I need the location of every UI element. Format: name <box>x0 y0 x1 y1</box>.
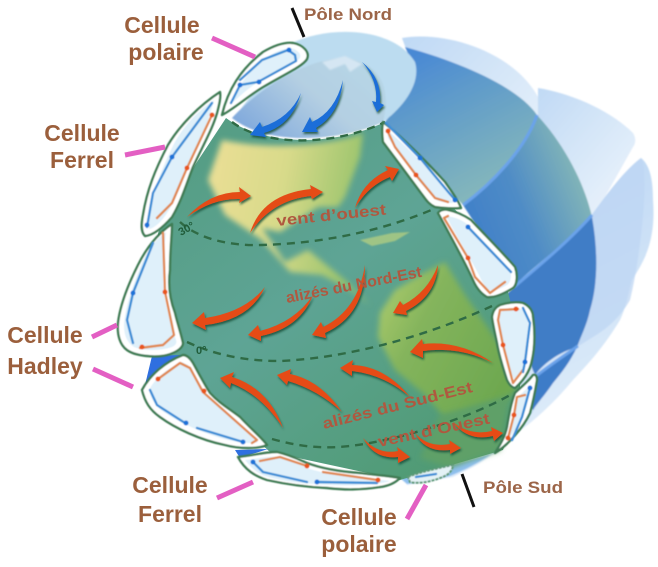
text: alizés du Sud-Est: alizés du Sud-Est <box>321 379 474 433</box>
arrow: westerly 2 <box>250 185 323 233</box>
label 0 degrees: 0° <box>196 345 207 357</box>
globe front face <box>150 118 520 480</box>
south pole tick <box>462 474 474 507</box>
blue band two <box>463 115 592 285</box>
arrow: northeast trade 1 <box>192 287 265 330</box>
circulation cells <box>118 43 537 489</box>
label: Cellule Hadley: Hadley <box>7 353 83 379</box>
label: Cellule polaire top: Cellule <box>124 12 200 38</box>
dark blue wedges between cells <box>145 355 268 458</box>
arrow: southern westerly 2 <box>415 433 461 454</box>
arrow: polar east 2 <box>302 80 343 132</box>
leader: Ferrel top <box>125 147 165 155</box>
cell: Ferrel, lower right <box>495 375 537 453</box>
inner lighter ribbon <box>577 158 645 347</box>
arrow: northeast trade 4 <box>393 265 438 315</box>
label: Cellule polaire bottom: Cellule <box>321 504 397 530</box>
southern land <box>420 395 510 468</box>
cell: Ferrel, bottom <box>238 452 400 489</box>
south rim <box>400 408 535 484</box>
label: Cellule Hadley: Cellule <box>7 322 83 348</box>
label: Cellule polaire bottom: polaire <box>321 531 397 557</box>
cell labels <box>7 12 397 557</box>
north polar cap <box>240 32 416 122</box>
North America <box>208 133 370 305</box>
leader: Hadley lower <box>93 369 133 387</box>
north polar cap, inner tone <box>232 58 386 138</box>
arrow: southern westerly 1 <box>363 438 410 463</box>
label: Cellule Ferrel bottom: Cellule <box>132 472 208 498</box>
arrow: polar east 1 <box>250 93 301 137</box>
cell: polar, top <box>222 43 308 115</box>
leader: polar top <box>212 38 255 57</box>
cell: polar, bottom <box>408 465 453 483</box>
text: vent d'ouest: vent d’ouest <box>276 202 387 230</box>
wedge at equator <box>145 355 182 385</box>
cell: Hadley, upper right <box>438 210 517 297</box>
wind arrows <box>187 62 503 463</box>
label: Pôle Sud: Pôle Sud <box>483 478 563 497</box>
wind labels <box>276 202 491 451</box>
cell: Hadley, lower left <box>142 355 267 448</box>
cell leader lines <box>92 38 426 519</box>
blue band three <box>497 217 596 375</box>
arrow: polar east 3 <box>362 62 384 112</box>
pale outer layer, upper <box>385 37 541 200</box>
globe background layers <box>232 32 653 485</box>
arrow: southern westerly 3 <box>453 422 503 441</box>
South America <box>378 262 518 418</box>
wedge at southern Hadley cell <box>235 449 268 458</box>
light band edges <box>463 115 592 376</box>
pale outer layer, lower <box>400 158 653 485</box>
cell: Hadley, left <box>118 224 183 356</box>
latitude lines <box>176 122 512 447</box>
leader: Hadley upper <box>92 325 117 337</box>
label: Cellule Ferrel top: Cellule <box>44 120 120 146</box>
text: vent d'Ouest: vent d’Ouest <box>376 411 491 451</box>
label: Cellule polaire top: polaire <box>128 39 204 65</box>
leader: Ferrel bottom <box>217 482 253 498</box>
arrow: westerly 1 <box>187 187 251 217</box>
blue band four <box>520 347 577 410</box>
latitude 30 south dashed line <box>272 394 512 447</box>
polar cap snow <box>322 56 362 72</box>
north pole tick <box>292 8 304 37</box>
arctic circle dashed line <box>232 122 385 140</box>
arrow: northeast trade 2 <box>248 295 313 341</box>
label: Cellule Ferrel bottom: Ferrel <box>138 501 202 527</box>
pale outer layer, middle <box>520 88 635 220</box>
leader: polar bottom <box>407 485 426 519</box>
cell: Ferrel, upper left <box>142 92 220 236</box>
arrow: southeast trade 4 <box>220 372 283 428</box>
label 30 degrees: 30° <box>176 220 197 239</box>
arrow: northeast trade 3 <box>312 265 365 338</box>
cell: Ferrel, upper right <box>382 122 461 208</box>
equator dashed line <box>187 306 492 361</box>
Caribbean islands <box>360 232 410 246</box>
latitude 30 north dashed line <box>180 208 436 245</box>
text: alizés du Nord-Est: alizés du Nord-Est <box>285 264 423 307</box>
arrow: southeast trade 2 <box>340 360 410 397</box>
label: Pôle Nord: Pôle Nord <box>304 5 392 24</box>
pole markers <box>292 5 563 507</box>
cell: Hadley, right <box>492 302 534 388</box>
label: Cellule Ferrel top: Ferrel <box>50 147 114 173</box>
arrow: southeast trade 3 <box>277 369 342 412</box>
blue band one <box>385 47 537 205</box>
arrow: southeast trade 1 <box>410 339 493 363</box>
arrow: westerly 3 <box>355 166 399 208</box>
ocean <box>150 118 520 480</box>
